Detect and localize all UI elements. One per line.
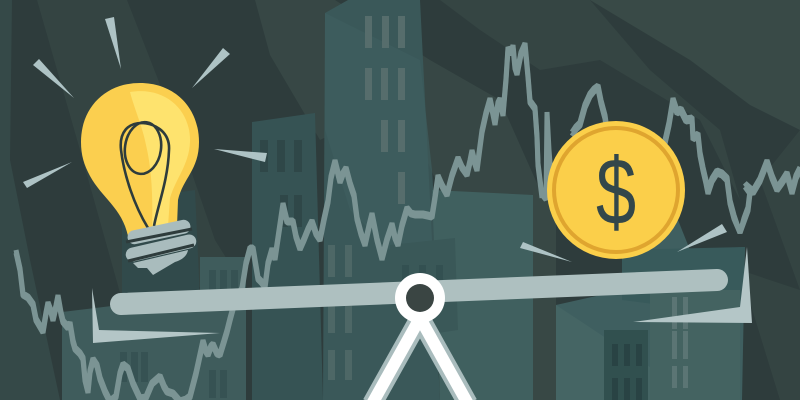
bulb glass xyxy=(81,83,199,236)
scale fulcrum legs xyxy=(372,318,468,400)
right tilt marker xyxy=(633,247,752,323)
screw base xyxy=(124,218,198,275)
bulb highlight xyxy=(130,91,190,229)
scale beam xyxy=(121,280,717,304)
building: central right block xyxy=(390,190,533,400)
scale pivot xyxy=(395,273,445,323)
filament xyxy=(121,120,169,228)
building: lower left blocks xyxy=(62,190,246,400)
icon: bulb rays xyxy=(23,17,267,188)
icon: dollar coin xyxy=(547,121,685,259)
icon: light bulb xyxy=(81,83,199,275)
building: tall centre tower xyxy=(323,0,440,400)
dark column xyxy=(533,190,556,400)
left tilt marker xyxy=(92,288,220,343)
icon: coin impact rays xyxy=(520,224,727,262)
dollar sign: $ xyxy=(596,138,636,244)
building: right blocks xyxy=(556,200,745,400)
building: left mid block xyxy=(252,113,323,400)
